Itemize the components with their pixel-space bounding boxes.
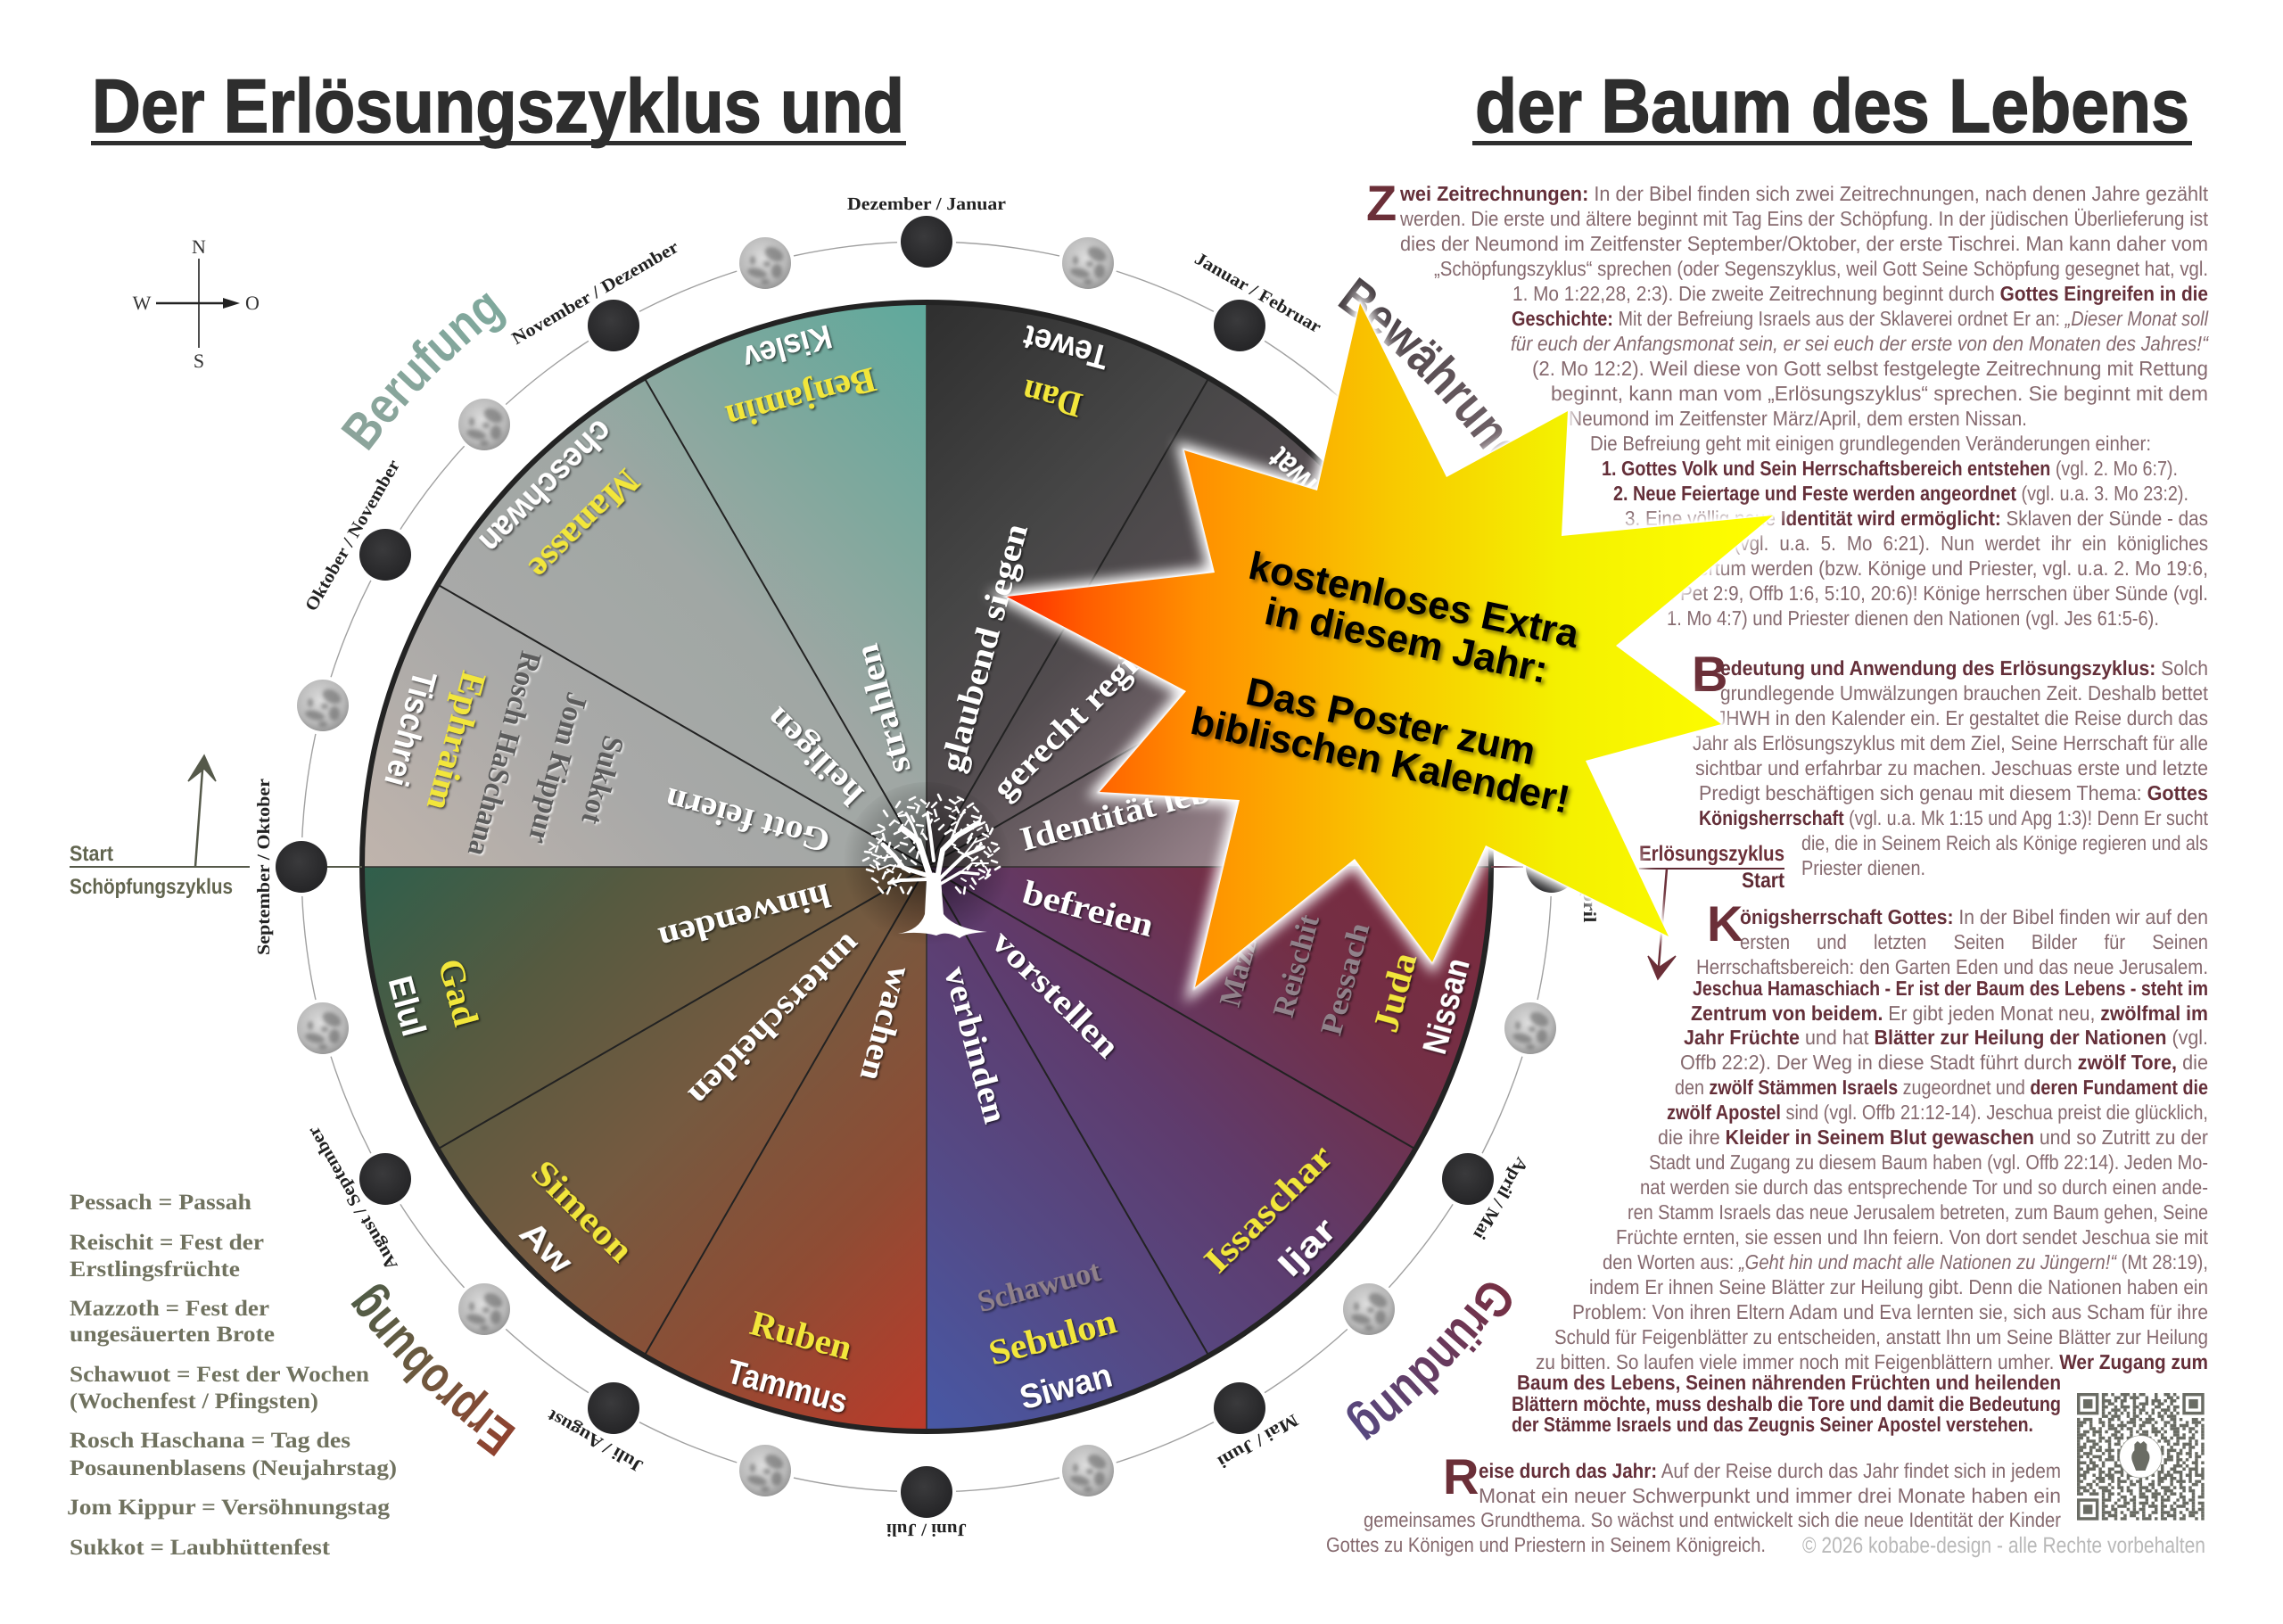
feast names: Tischrei sector: Rosch HaSchana bbox=[461, 647, 548, 860]
text block: Königsherrschaft Gottes: Stadt und Zugang zu diesem Baum haben (vgl. Offb 22:14). Jeden Mo- bbox=[1649, 1150, 2208, 1174]
text block: Königsherrschaft Gottes: zu bitten. So laufen viele immer noch mit Feigenblättern umher. Wer Zugang zum bbox=[1536, 1350, 2208, 1373]
start marker: Schöpfungszyklus: Start bbox=[70, 842, 113, 866]
text block: Zwei Zeitrechnungen: dies der Neumond im Zeitfenster September/Oktober, der erste Tischrei. Man kann daher vom bbox=[1400, 232, 2208, 255]
feast names: Tischrei sector: Sukkot bbox=[574, 732, 630, 828]
verbs radiating from the tree: heiligen bbox=[758, 700, 871, 812]
verbs radiating from the tree: wachen bbox=[853, 962, 919, 1084]
legend of feast names: Mazzoth = Fest der bbox=[70, 1297, 269, 1321]
verbs radiating from the tree: verbinden bbox=[936, 962, 1014, 1127]
tribe names in the wheel: Issaschar bbox=[1196, 1136, 1340, 1281]
legend of feast names: (Wochenfest / Pfingsten) bbox=[70, 1389, 318, 1414]
promo star text bbox=[1187, 544, 1583, 822]
text block: Zwei Zeitrechnungen: beginnt, kann man vom „Erlösungszyklus“ sprechen. Sie beginnt mit dem bbox=[1551, 382, 2208, 405]
text block: Königsherrschaft Gottes: den zwölf Stämmen Israels zugeordnet und deren Fundament die bbox=[1675, 1076, 2208, 1099]
moon phases around the wheel bbox=[272, 212, 1581, 1521]
gregorian month labels: November / Dezember bbox=[508, 237, 682, 349]
month names in the wheel: Schwat bbox=[1261, 440, 1354, 532]
text block: Reise durch das Jahr bbox=[1326, 1448, 2061, 1556]
tribe names in the wheel: Manasse bbox=[521, 461, 647, 588]
text block: Bedeutung und Anwendung: JHWH in den Kalender ein. Er gestaltet die Reise durch das bbox=[1717, 706, 2208, 730]
text block: Zwei Zeitrechnungen: Geschichte: Mit der Befreiung Israels aus der Sklaverei ordnet Er an: „Dieser Monat soll bbox=[1512, 307, 2209, 330]
text block: Königsherrschaft Gottes: Zentrum von beidem. Er gibt jeden Monat neu, zwölfmal im bbox=[1691, 1002, 2208, 1025]
icon: tree of life bbox=[863, 795, 1000, 938]
gregorian month labels: September / Oktober bbox=[254, 779, 274, 955]
tribe names in the wheel: Juda bbox=[1365, 948, 1424, 1036]
text block: Königsherrschaft Gottes bbox=[1512, 895, 2209, 1436]
text block: Königsherrschaft Gottes: den Worten aus: „Geht hin und macht alle Nationen zu Jüngern!“ (Mt 28:19), bbox=[1603, 1250, 2208, 1274]
wheel: four gradient quadrants with sector dividers bbox=[362, 302, 1491, 1431]
verbs radiating from the tree bbox=[655, 520, 1250, 1127]
promo star text: kostenloses Extra bbox=[1245, 544, 1583, 656]
legend of feast names: Reischit = Fest der bbox=[70, 1231, 264, 1255]
text block: Zwei Zeitrechnungen: 1. Gottes Volk und Sein Herrschaftsbereich entstehen (vgl. 2. Mo 6:7). bbox=[1602, 457, 2178, 480]
gregorian month labels bbox=[254, 194, 1599, 1539]
gregorian month labels: Juli / August bbox=[544, 1406, 647, 1476]
start marker: Erlösungszyklus bbox=[1491, 842, 1784, 979]
section heading: Erprobung: Erprobung bbox=[351, 1284, 515, 1457]
text block: Zwei Zeitrechnungen: 1. Mo 4:7) und Priester dienen den Nationen (vgl. Jes 61:5-6). bbox=[1667, 606, 2159, 630]
compass: N bbox=[192, 235, 206, 258]
text block: Bedeutung und Anwendung: die, die in Seinem Reich als Könige regieren und als bbox=[1801, 831, 2208, 854]
text block: Zwei Zeitrechnungen: 2. Neue Feiertage und Feste werden angeordnet (vgl. u.a. 3. Mo 23:2). bbox=[1613, 482, 2188, 505]
feast names: Nissan and Siwan sectors: Pessach bbox=[1315, 919, 1377, 1039]
text block: Königsherrschaft Gottes: Schuld für Feigenblätter zu entscheiden, anstatt Ihn um Seine Blätter zur Heilung bbox=[1554, 1325, 2208, 1348]
start marker: Schöpfungszyklus bbox=[70, 755, 362, 899]
section heading: Berufung: Berufung bbox=[341, 293, 507, 451]
gregorian month labels: Januar / Februar bbox=[1191, 249, 1324, 337]
verbs radiating from the tree: gerecht regieren bbox=[985, 598, 1195, 807]
verbs radiating from the tree: unterscheiden bbox=[681, 926, 869, 1113]
text block: Königsherrschaft Gottes: Jahr Früchte und hat Blätter zur Heilung der Nationen (vgl. bbox=[1684, 1026, 2208, 1049]
text block: Zwei Zeitrechnungen: 1. Pet 2:9, Offb 1:6, 5:10, 20:6)! Könige herrschen über Sünde (vgl. bbox=[1660, 581, 2208, 605]
gregorian month labels: Februar / März bbox=[1458, 473, 1543, 598]
verbs radiating from the tree: glaubend siegen bbox=[933, 520, 1035, 776]
month names in the wheel: Tewet bbox=[1019, 317, 1113, 375]
promo star text: in diesem Jahr: bbox=[1261, 589, 1552, 692]
text block: Königsherrschaft Gottes: nat werden sie durch das entsprechende Tor und so durch einen ande- bbox=[1640, 1175, 2208, 1199]
text block: Bedeutung und Anwendung: Königsherrschaft (vgl. u.a. Mk 1:15 und Apg 1:3)! Denn Er sucht bbox=[1699, 806, 2209, 829]
feast names: Nissan and Siwan sectors bbox=[974, 894, 1377, 1319]
tribe names in the wheel: Ephraim bbox=[419, 667, 494, 814]
text block: Zwei Zeitrechnungen: Die Befreiung geht mit einigen grundlegenden Veränderungen einher: bbox=[1590, 432, 2151, 455]
promo star burst bbox=[1007, 303, 1773, 987]
text block: Zwei Zeitrechnungen: werden. Die erste und ältere beginnt mit Tag Eins der Schöpfung. In der jüdischen Überlieferung ist bbox=[1399, 207, 2209, 230]
legend of feast names: Posaunenblasens (Neujahrstag) bbox=[70, 1456, 397, 1480]
text block: Zwei Zeitrechnungen: Neumond im Zeitfenster März/April, dem ersten Nissan. bbox=[1569, 407, 2027, 430]
legend of feast names: ungesäuerten Brote bbox=[70, 1323, 275, 1347]
text block: Bedeutung und Anwendung: B bbox=[1692, 646, 1727, 702]
text block: Zwei Zeitrechnungen: Priestertum werden (bzw. Könige und Priester, vgl. u.a. 2. Mo 19:6, bbox=[1650, 556, 2208, 580]
text block: Königsherrschaft Gottes: Baum des Lebens, Seinen nährenden Früchten und heilenden bbox=[1517, 1371, 2061, 1394]
gregorian month labels: Oktober / November bbox=[301, 457, 404, 614]
text block: Zwei Zeitrechnungen: 3. Eine völlig neue Identität wird ermöglicht: Sklaven der Sünde - das bbox=[1625, 507, 2208, 530]
legend of feast names: Schawuot = Fest der Wochen bbox=[70, 1363, 369, 1387]
month names in the wheel: Elul bbox=[380, 972, 433, 1041]
text block: Königsherrschaft Gottes: Offb 22:2). Der Weg in diese Stadt führt durch zwölf Tore, die bbox=[1680, 1051, 2208, 1074]
title left: Der Erlösungszyklus und bbox=[92, 64, 904, 149]
text block: Bedeutung und Anwendung: Predigt beschäftigen sich genau mit diesem Thema: Gottes bbox=[1699, 781, 2208, 804]
gregorian month labels: August / September bbox=[303, 1123, 402, 1274]
tribe names in the wheel: Ruben bbox=[746, 1302, 856, 1368]
month names in the wheel: Tammus bbox=[723, 1353, 852, 1422]
gregorian month labels: Dezember / Januar bbox=[847, 194, 1006, 214]
tribe names in the wheel: Gad bbox=[430, 954, 487, 1030]
QR code bbox=[2077, 1393, 2205, 1519]
feast names: Nissan and Siwan sectors: Mazzoth bbox=[1214, 894, 1274, 1010]
month names in the wheel: Aw bbox=[512, 1214, 580, 1282]
verbs radiating from the tree: befreien bbox=[1018, 874, 1158, 944]
text block: Bedeutung und Anwendung: Priester dienen. bbox=[1801, 856, 1925, 879]
gregorian month labels: Juni / Juli bbox=[886, 1520, 967, 1539]
text block: Zwei Zeitrechnungen bbox=[1366, 175, 2209, 630]
tribe names in the wheel: Sebulon bbox=[985, 1300, 1121, 1373]
month names in the wheel: Kislev bbox=[738, 317, 836, 376]
verbs radiating from the tree: strahlen bbox=[848, 640, 919, 777]
gregorian month labels: Mai / Juni bbox=[1214, 1410, 1301, 1471]
verbs radiating from the tree: vorstellen bbox=[984, 923, 1126, 1066]
promo star text: Das Poster zum bbox=[1242, 670, 1539, 773]
section heading: Bewährung: Bewährung bbox=[1338, 277, 1510, 452]
copyright: © 2026 kobabe-design - alle Rechte vorbehalten bbox=[1802, 1533, 2205, 1558]
month names in the wheel: Siwan bbox=[1016, 1357, 1116, 1417]
text block: Bedeutung und Anwendung: Jahr als Erlösungszyklus mit dem Ziel, Seine Herrschaft für alle bbox=[1693, 731, 2208, 754]
gregorian month labels: April / Mai bbox=[1469, 1154, 1531, 1243]
legend of feast names: Sukkot = Laubhüttenfest bbox=[70, 1536, 331, 1560]
feast names: Tischrei sector: Jom Kippur bbox=[522, 688, 593, 847]
month names in the wheel: cheschwan bbox=[472, 412, 620, 560]
text block: Reise durch das Jahr: R bbox=[1443, 1448, 1479, 1504]
compass: S bbox=[194, 350, 204, 372]
text block: Bedeutung und Anwendung bbox=[1692, 646, 2209, 879]
verbs radiating from the tree: hinwenden bbox=[655, 876, 835, 957]
start marker: Erlösungszyklus: Start bbox=[1742, 869, 1784, 893]
text block: Königsherrschaft Gottes: K bbox=[1707, 895, 1743, 952]
tribe names in the wheel: Simeon bbox=[523, 1152, 641, 1270]
tribe names in the wheel: Benjamin bbox=[721, 359, 880, 438]
section heading: Gründung: Gründung bbox=[1347, 1282, 1512, 1441]
text block: Reise durch das Jahr: Gottes zu Königen und Priestern in Seinem Königreich. bbox=[1326, 1533, 1766, 1556]
text block: Zwei Zeitrechnungen: für euch der Anfangsmonat sein, er sei euch der erste von den Monaten des Jahres!“ bbox=[1511, 332, 2209, 355]
text block: Königsherrschaft Gottes: indem Er ihnen Seine Blätter zur Heilung gibt. Denn die Nationen haben ein bbox=[1589, 1275, 2208, 1298]
tribe names in the wheel bbox=[419, 359, 1424, 1373]
text block: Königsherrschaft Gottes: Früchte ernten, sie essen und Ihn feiern. Von dort sendet Jeschua sie mit bbox=[1616, 1225, 2209, 1249]
start marker: Schöpfungszyklus: Schöpfungszyklus bbox=[70, 875, 233, 899]
text block: Reise durch das Jahr: Monat ein neuer Schwerpunkt und immer drei Monate haben ein bbox=[1479, 1484, 2061, 1507]
text block: Königsherrschaft Gottes: Herrschaftsbereich: den Garten Eden und das neue Jerusalem. bbox=[1696, 955, 2208, 978]
text block: Königsherrschaft Gottes: ersten und letzten Seiten Bilder für Seinen bbox=[1740, 930, 2208, 953]
text block: Reise durch das Jahr: eise durch das Jahr: Auf der Reise durch das Jahr findet sich in jedem bbox=[1479, 1459, 2061, 1482]
feast names: Tischrei sector bbox=[461, 647, 630, 860]
text block: Königsherrschaft Gottes: der Stämme Israels und das Zeugnis Seiner Apostel verstehen. bbox=[1512, 1413, 2033, 1436]
text block: Zwei Zeitrechnungen: (2. Mo 12:2). Weil diese von Gott selbst festgelegte Zeitrechnung mit Rettung bbox=[1532, 357, 2208, 380]
text block: Bedeutung und Anwendung: grundlegende Umwälzungen brauchen Zeit. Deshalb bettet bbox=[1720, 681, 2209, 705]
legend of feast names: Jom Kippur = Versöhnungstag bbox=[67, 1496, 391, 1520]
gregorian month labels: März / April bbox=[1579, 812, 1599, 923]
text block: Reise durch das Jahr: gemeinsames Grundthema. So wächst und entwickelt sich die neue Identität der Kinder bbox=[1364, 1508, 2061, 1531]
text block: Zwei Zeitrechnungen: waren wir (vgl. u.a. 5. Mo 6:21). Nun werdet ihr ein königliches bbox=[1638, 532, 2208, 555]
text block: Königsherrschaft Gottes: Jeschua Hamaschiach - Er ist der Baum des Lebens - steht im bbox=[1693, 977, 2208, 1000]
month names in the wheel: Nissan bbox=[1416, 954, 1478, 1058]
start marker: Erlösungszyklus: Erlösungszyklus bbox=[1639, 842, 1784, 866]
month names in the wheel: Tischrei bbox=[376, 667, 443, 790]
text block: Königsherrschaft Gottes: Blättern möchte, muss deshalb die Tore und damit die Bedeutung bbox=[1512, 1392, 2061, 1415]
promo star text: biblischen Kalender! bbox=[1187, 699, 1573, 822]
feast names: Nissan and Siwan sectors: Reischit bbox=[1267, 911, 1326, 1020]
legend of feast names: Erstlingsfrüchte bbox=[70, 1257, 240, 1282]
text block: Zwei Zeitrechnungen: 1. Mo 1:22,28, 2:3). Die zweite Zeitrechnung beginnt durch Gottes Eingreifen in die bbox=[1512, 282, 2208, 305]
tribe names in the wheel: Dan bbox=[1018, 372, 1086, 425]
text block: Zwei Zeitrechnungen: Z bbox=[1366, 175, 1397, 231]
text block: Königsherrschaft Gottes: Problem: Von ihren Eltern Adam und Eva lernten sie, sich aus Scham für ihre bbox=[1572, 1300, 2208, 1323]
legend of feast names: Pessach = Passah bbox=[70, 1191, 251, 1215]
month names in the wheel bbox=[376, 317, 1478, 1422]
month names in the wheel: Ijar bbox=[1271, 1211, 1344, 1284]
verbs radiating from the tree: Gott feiern bbox=[662, 780, 834, 860]
legend of feast names: Rosch Haschana = Tag des bbox=[70, 1429, 350, 1453]
text block: Königsherrschaft Gottes: ren Stamm Israels das neue Jerusalem betreten, zum Baum gehen, Seine bbox=[1628, 1200, 2208, 1224]
legend of feast names bbox=[67, 1191, 397, 1560]
title right: der Baum des Lebens bbox=[1475, 64, 2189, 149]
verbs radiating from the tree: Identität leben bbox=[1017, 763, 1250, 859]
compass bbox=[133, 235, 260, 372]
moon orbit ring bbox=[301, 242, 1552, 1492]
text block: Königsherrschaft Gottes: önigsherrschaft Gottes: In der Bibel finden wir auf den bbox=[1740, 905, 2208, 928]
text block: Bedeutung und Anwendung: sichtbar und erfahrbar zu machen. Jeschuas erste und letzte bbox=[1695, 756, 2208, 779]
text block: Königsherrschaft Gottes: zwölf Apostel sind (vgl. Offb 21:12-14). Jeschua preist die glücklich, bbox=[1667, 1101, 2208, 1124]
text block: Bedeutung und Anwendung: edeutung und Anwendung des Erlösungszyklus: Solch bbox=[1720, 656, 2208, 680]
feast names: Nissan and Siwan sectors: Schawuot bbox=[974, 1255, 1105, 1319]
compass: W bbox=[133, 292, 152, 314]
text block: Königsherrschaft Gottes: die ihre Kleider in Seinem Blut gewaschen und so Zutritt zu der bbox=[1658, 1125, 2208, 1149]
compass: O bbox=[245, 292, 260, 314]
text block: Zwei Zeitrechnungen: wei Zeitrechnungen: In der Bibel finden sich zwei Zeitrechnungen, nach denen Jahre gezählt bbox=[1399, 182, 2209, 205]
